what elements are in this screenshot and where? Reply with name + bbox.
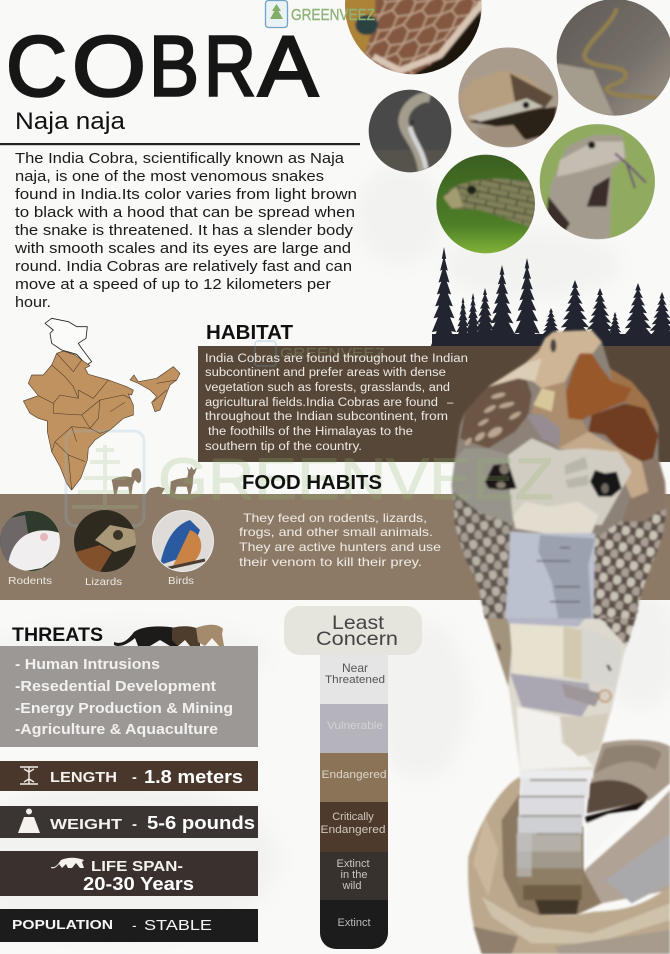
status: vulnerable — [320, 704, 388, 753]
habitat text: the foothills of the Himalayas to the — [208, 426, 413, 438]
prey: lizards — [74, 510, 136, 588]
status: extinct: Extinct — [337, 917, 371, 929]
photo collage — [340, 0, 670, 257]
length bar — [0, 761, 258, 791]
title: B — [149, 20, 199, 115]
status: extinct in the wild: Extinct — [336, 858, 370, 870]
habitat text: subcontinent and prefer areas with dense — [205, 367, 446, 379]
habitat text: throughout the Indian subcontinent, from — [205, 411, 448, 423]
threats panel: -Resedential Development — [15, 678, 216, 695]
title — [6, 20, 318, 115]
title: O — [72, 20, 146, 115]
label rodents: Rodents — [8, 575, 52, 587]
threats heading: THREATS — [12, 625, 103, 646]
status: extinct — [320, 900, 388, 949]
intro paragraph: with smooth scales and its eyes are large and — [14, 241, 351, 257]
cobra coil — [468, 740, 670, 954]
status: near threatened: Threatened — [325, 674, 385, 686]
icon: panther — [51, 858, 84, 868]
photo: coiled snake head — [457, 47, 560, 150]
status: extinct in the wild — [320, 852, 388, 900]
food habits text: They feed on rodents, lizards, — [243, 511, 427, 525]
icon: weight — [18, 808, 40, 833]
intro paragraph — [0, 143, 360, 311]
status: endangered — [320, 753, 388, 802]
habitat text: India Cobras are found throughout the Indian — [205, 353, 468, 365]
scientific name: Naja naja — [15, 108, 126, 135]
top logo — [266, 0, 375, 28]
cobra illustration — [452, 330, 670, 954]
habitat text: vegetation such as forests, grasslands, and — [205, 382, 450, 394]
intro paragraph: the snake is threatened. It has a slender body — [15, 223, 354, 239]
intro paragraph: to black with a hood that can be spread when — [15, 205, 355, 221]
cobra lower hood — [483, 610, 638, 770]
prey: rodents — [0, 510, 62, 587]
intro paragraph: move at a speed of up to 12 kilometers per — [15, 277, 331, 293]
population bar: STABLE — [144, 917, 212, 934]
habitat text — [205, 353, 468, 453]
photo: small cobra on dark background — [367, 88, 453, 175]
habitat panel — [198, 346, 670, 462]
habitat text: southern tip of the country. — [205, 441, 362, 453]
intro paragraph: The India Cobra, scientifically known as Naja — [15, 151, 345, 167]
threats panel: - Human Intrusions — [15, 656, 160, 673]
threats panel: -Energy Production & Mining — [15, 700, 233, 717]
photo: cobra with tongue — [538, 123, 657, 240]
second logo over habitat — [255, 341, 385, 366]
intro paragraph: naja, is one of the most venomous snakes — [15, 169, 324, 185]
status: least concern: Concern — [316, 628, 398, 650]
food habits text: frogs, and other small animals. — [239, 525, 433, 539]
status: least concern: Least — [332, 612, 385, 634]
status: critically endangered: Endangered — [320, 824, 386, 836]
map of India — [23, 318, 180, 490]
watermark logo and name — [66, 431, 554, 526]
intro paragraph: found in India.Its color varies from light brown — [15, 187, 357, 203]
threats panel — [0, 646, 258, 747]
life span bar — [0, 851, 258, 896]
population bar: - — [132, 917, 137, 933]
status: near threatened — [320, 650, 388, 704]
intro paragraph: hour. — [15, 295, 51, 311]
status: extinct in the wild: in the — [341, 869, 367, 881]
weight bar — [0, 806, 258, 838]
icon: I-beam — [20, 767, 38, 784]
weight bar: - — [132, 816, 137, 833]
habitat text: – — [447, 397, 454, 409]
status: critically endangered — [320, 802, 388, 852]
weight bar: WEIGHT — [50, 816, 122, 833]
food habits band — [0, 494, 670, 600]
food habits text — [239, 511, 441, 569]
status: critically endangered: Critically — [332, 811, 374, 823]
status: endangered: Endangered — [322, 769, 386, 781]
habitat heading: HABITAT — [206, 322, 293, 344]
photo: snake scales close-up — [340, 0, 487, 77]
food habits heading: FOOD HABITS — [242, 472, 382, 494]
icon: big cat silhouettes — [114, 625, 224, 646]
population bar — [0, 909, 258, 942]
second logo over habitat: GREENVEEZ — [280, 345, 385, 362]
life span bar: LIFE SPAN- — [91, 858, 183, 875]
cobra neck — [517, 760, 593, 914]
length bar: LENGTH — [50, 770, 117, 786]
title: C — [6, 20, 67, 115]
forest silhouette — [431, 247, 670, 346]
status: near threatened: Near — [342, 661, 368, 675]
label lizards: Lizards — [85, 576, 122, 588]
status: extinct in the wild: wild — [342, 880, 361, 892]
watermark logo and name: GREENVEEZ — [158, 447, 554, 512]
population bar: POPULATION — [12, 917, 113, 932]
length bar: - — [132, 770, 137, 786]
photo: snake on rock — [553, 0, 670, 120]
title: A — [258, 20, 318, 115]
food habits text: their venom to kill their prey. — [239, 555, 422, 569]
weight bar: 5-6 pounds — [147, 813, 255, 833]
cobra hood and head — [452, 330, 667, 618]
conservation status scale — [284, 606, 422, 949]
title: R — [204, 20, 256, 115]
food habits text: They are active hunters and use — [239, 540, 441, 554]
photo: olive snake on green — [435, 153, 538, 257]
intro paragraph: round. India Cobras are relatively fast and can — [15, 259, 352, 275]
animal silhouettes — [112, 467, 197, 494]
status: least concern — [284, 606, 422, 655]
length bar: 1.8 meters — [144, 767, 243, 787]
habitat text: agricultural fields.India Cobras are found — [205, 397, 438, 409]
status: vulnerable: Vulnerable — [327, 720, 383, 732]
life span bar: 20-30 Years — [83, 874, 194, 894]
threats panel: -Agriculture & Aquaculture — [15, 721, 218, 738]
prey: birds — [152, 510, 214, 587]
top logo: GREENVEEZ — [291, 7, 375, 24]
label birds: Birds — [168, 575, 194, 587]
